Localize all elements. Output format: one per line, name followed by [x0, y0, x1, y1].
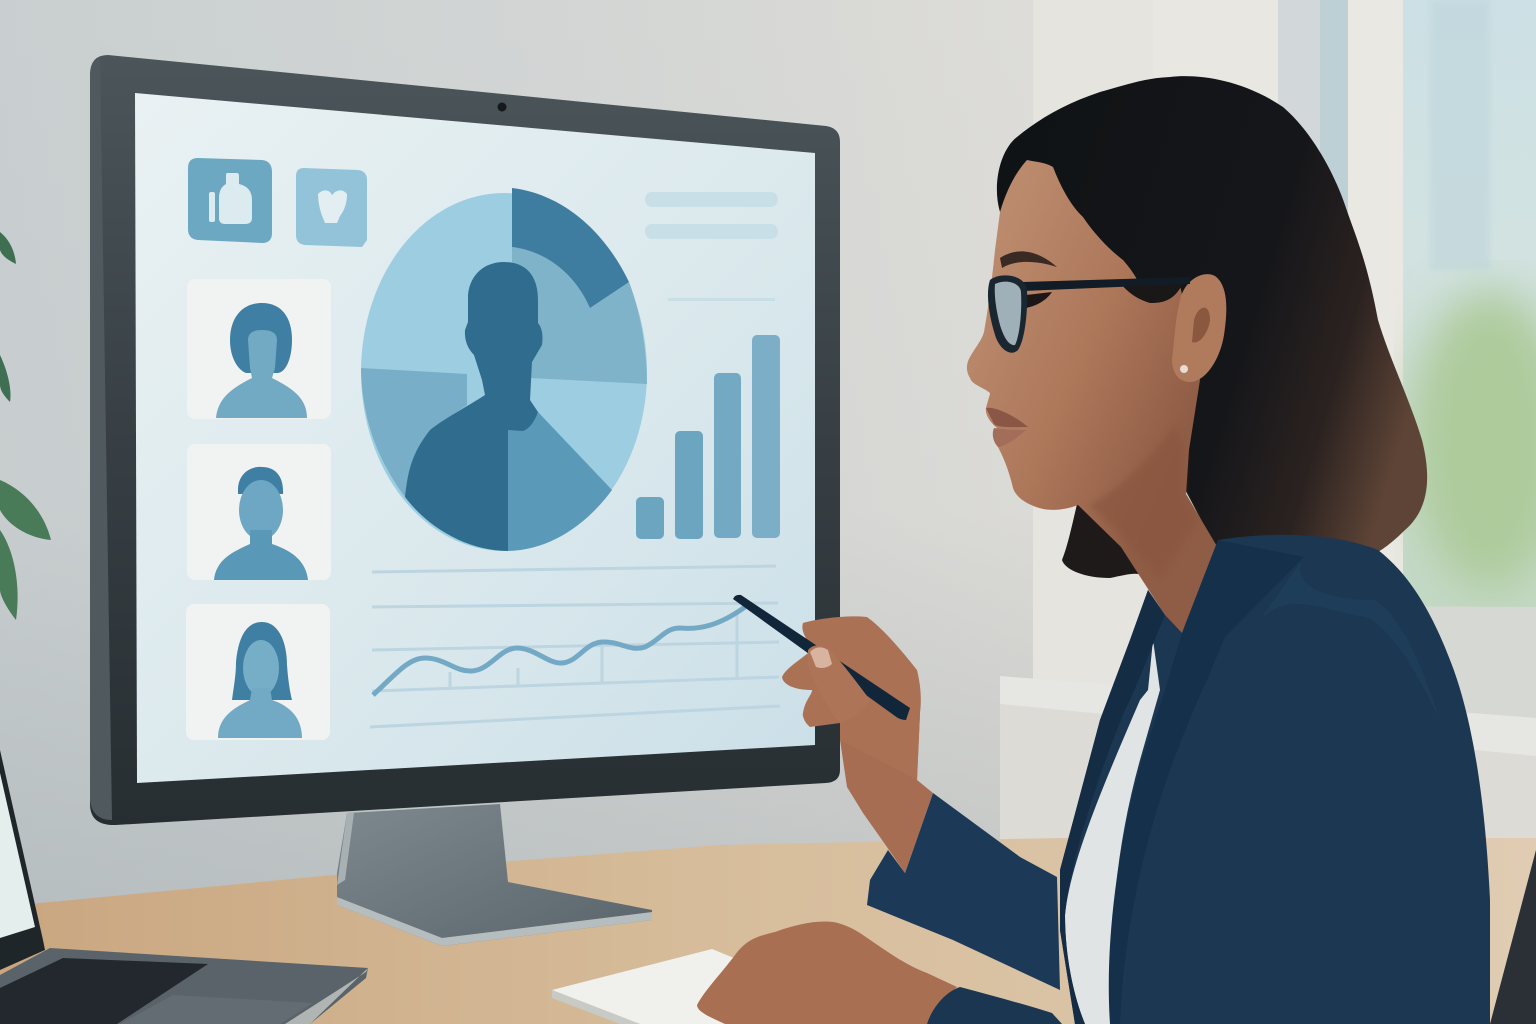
- bar chart: [636, 298, 780, 539]
- notebook: [552, 949, 800, 1024]
- pen: [733, 595, 910, 720]
- eyebrow: [1000, 251, 1057, 268]
- pie segment bottom right: [508, 412, 612, 551]
- neck shadow: [1090, 425, 1198, 580]
- hair back: [997, 76, 1427, 552]
- blazer torso: [1060, 535, 1490, 1024]
- profile card 2: [187, 444, 331, 580]
- shirt: [1065, 640, 1160, 1024]
- ear: [1172, 274, 1226, 382]
- webcam: [498, 102, 506, 112]
- eye: [1026, 292, 1052, 308]
- window: [1278, 0, 1536, 680]
- pie segment left mid: [361, 368, 467, 497]
- screen: [135, 93, 815, 783]
- forearm: [840, 690, 933, 873]
- woman: [697, 76, 1490, 1024]
- like icon tile: [188, 158, 272, 243]
- window sill: [1000, 605, 1536, 1024]
- laptop screen: [0, 773, 35, 938]
- lips: [986, 408, 1028, 447]
- hair lobe behind neck: [1062, 500, 1142, 578]
- plant leaves: [0, 232, 51, 620]
- raised hand: [782, 616, 921, 780]
- chair: [1490, 850, 1536, 1024]
- pie segment right mid: [512, 247, 647, 384]
- laptop lid: [0, 750, 45, 970]
- profile card 1: [187, 279, 331, 419]
- right lapel: [1109, 540, 1304, 1024]
- pie chart with person silhouette: [361, 188, 647, 551]
- laptop: [0, 750, 368, 1024]
- summary text lines: [645, 192, 778, 239]
- monitor: [90, 55, 840, 825]
- shoulder seam: [1260, 553, 1440, 720]
- person silhouette: [405, 262, 542, 551]
- window alcove: [1033, 0, 1283, 900]
- desk: [0, 838, 1536, 1024]
- raised sleeve: [867, 793, 1060, 990]
- heart icon tile: [296, 168, 367, 247]
- monitor shell: [90, 55, 840, 825]
- laptop keyboard: [0, 958, 208, 1024]
- profile card 3: [186, 604, 330, 740]
- laptop base: [0, 948, 368, 1024]
- glasses: [988, 275, 1190, 353]
- earring: [1180, 365, 1188, 373]
- left lapel: [1060, 590, 1165, 1024]
- monitor stand: [337, 804, 652, 946]
- face and neck: [967, 160, 1218, 682]
- line chart: [370, 566, 780, 727]
- thumbnail: [810, 647, 832, 668]
- lower cuff: [927, 987, 1062, 1024]
- thumb: [808, 645, 870, 723]
- pie segment top right dark: [512, 188, 629, 308]
- lower hand on notebook: [697, 922, 957, 1024]
- sideburn: [1120, 280, 1185, 303]
